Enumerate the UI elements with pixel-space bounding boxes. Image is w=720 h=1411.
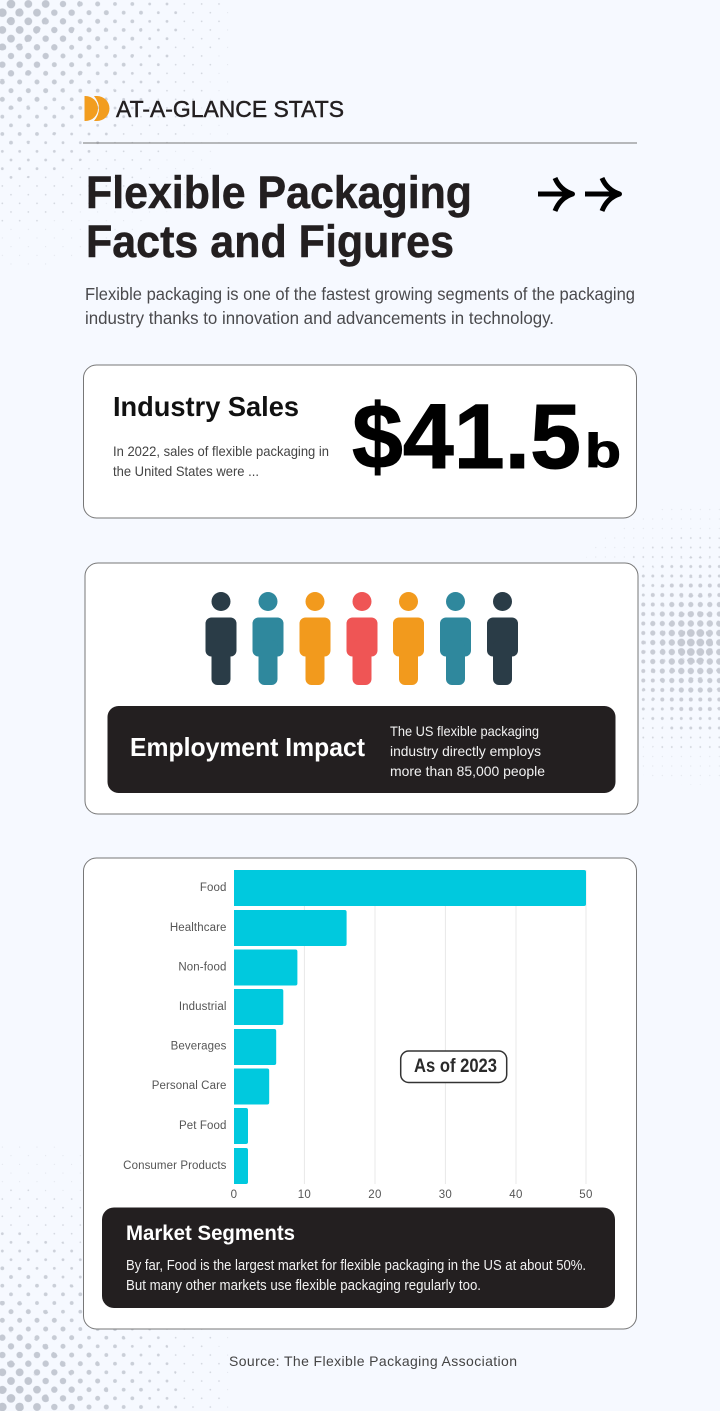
halftone dots: top left — [0, 0, 230, 270]
badge: as of 2023: As of 2023 — [414, 1056, 497, 1077]
category labels: Consumer Products — [123, 1160, 227, 1172]
callout text: By far, Food is the largest market for flexible packaging in the US at about 50%. — [126, 1258, 586, 1274]
callout heading: Market Segments — [126, 1222, 295, 1245]
axis labels: 0 — [231, 1189, 237, 1201]
axis labels: 30 — [439, 1189, 452, 1201]
category labels: Personal Care — [152, 1080, 226, 1092]
intro text — [85, 284, 635, 328]
category labels: Food — [200, 882, 226, 894]
axis labels — [231, 1189, 593, 1201]
bars — [234, 870, 586, 1184]
source note: Source: The Flexible Packaging Association — [229, 1353, 517, 1369]
big number: $41.5b: $41.5 — [352, 386, 581, 488]
category labels: Non-food — [178, 962, 226, 974]
title: Flexible Packaging — [86, 167, 472, 218]
panel: employment impact — [85, 563, 638, 814]
sales description: In 2022, sales of flexible packaging in — [113, 443, 329, 459]
category labels: Industrial — [179, 1001, 226, 1013]
title — [86, 167, 472, 267]
axis labels: 20 — [368, 1189, 382, 1201]
big number: $41.5b: b — [585, 424, 621, 477]
icon: row of seven people — [206, 592, 518, 685]
callout text: more than 85,000 people — [390, 763, 545, 779]
category labels — [123, 882, 227, 1172]
eyebrow label: AT-A-GLANCE STATS — [116, 96, 344, 122]
bar chart: market segments — [123, 870, 593, 1201]
halftone dots: right side — [555, 505, 720, 785]
callout text — [126, 1258, 586, 1294]
callout: employment impact — [108, 706, 616, 793]
callout text: The US flexible packaging — [390, 723, 539, 739]
header: at-a-glance stats — [84, 96, 344, 122]
intro text: industry thanks to innovation and advancements in technology. — [85, 308, 554, 328]
callout heading: Employment Impact — [130, 732, 365, 762]
callout: market segments — [102, 1208, 615, 1308]
halftone dots: bottom left — [0, 1141, 230, 1411]
icon: orange double D logo — [84, 96, 109, 121]
badge: as of 2023 — [401, 1051, 507, 1082]
icon: double arrows — [538, 178, 620, 211]
callout text: But many other markets use flexible packaging regularly too. — [126, 1278, 481, 1294]
axis labels: 50 — [579, 1189, 593, 1201]
intro text: Flexible packaging is one of the fastest growing segments of the packaging — [85, 284, 635, 304]
heading: industry sales: Industry Sales — [113, 391, 299, 422]
axis labels: 10 — [298, 1189, 311, 1201]
category labels: Pet Food — [179, 1120, 226, 1132]
axis labels: 40 — [509, 1189, 523, 1201]
sales description: the United States were ... — [113, 463, 259, 479]
category labels: Beverages — [171, 1040, 227, 1052]
panel: market segments — [84, 858, 636, 1329]
category labels: Healthcare — [170, 922, 226, 934]
callout text: industry directly employs — [390, 743, 541, 759]
panel: industry sales — [84, 365, 636, 518]
sales description — [113, 443, 329, 479]
callout text — [390, 723, 545, 779]
title: Facts and Figures — [86, 216, 454, 267]
